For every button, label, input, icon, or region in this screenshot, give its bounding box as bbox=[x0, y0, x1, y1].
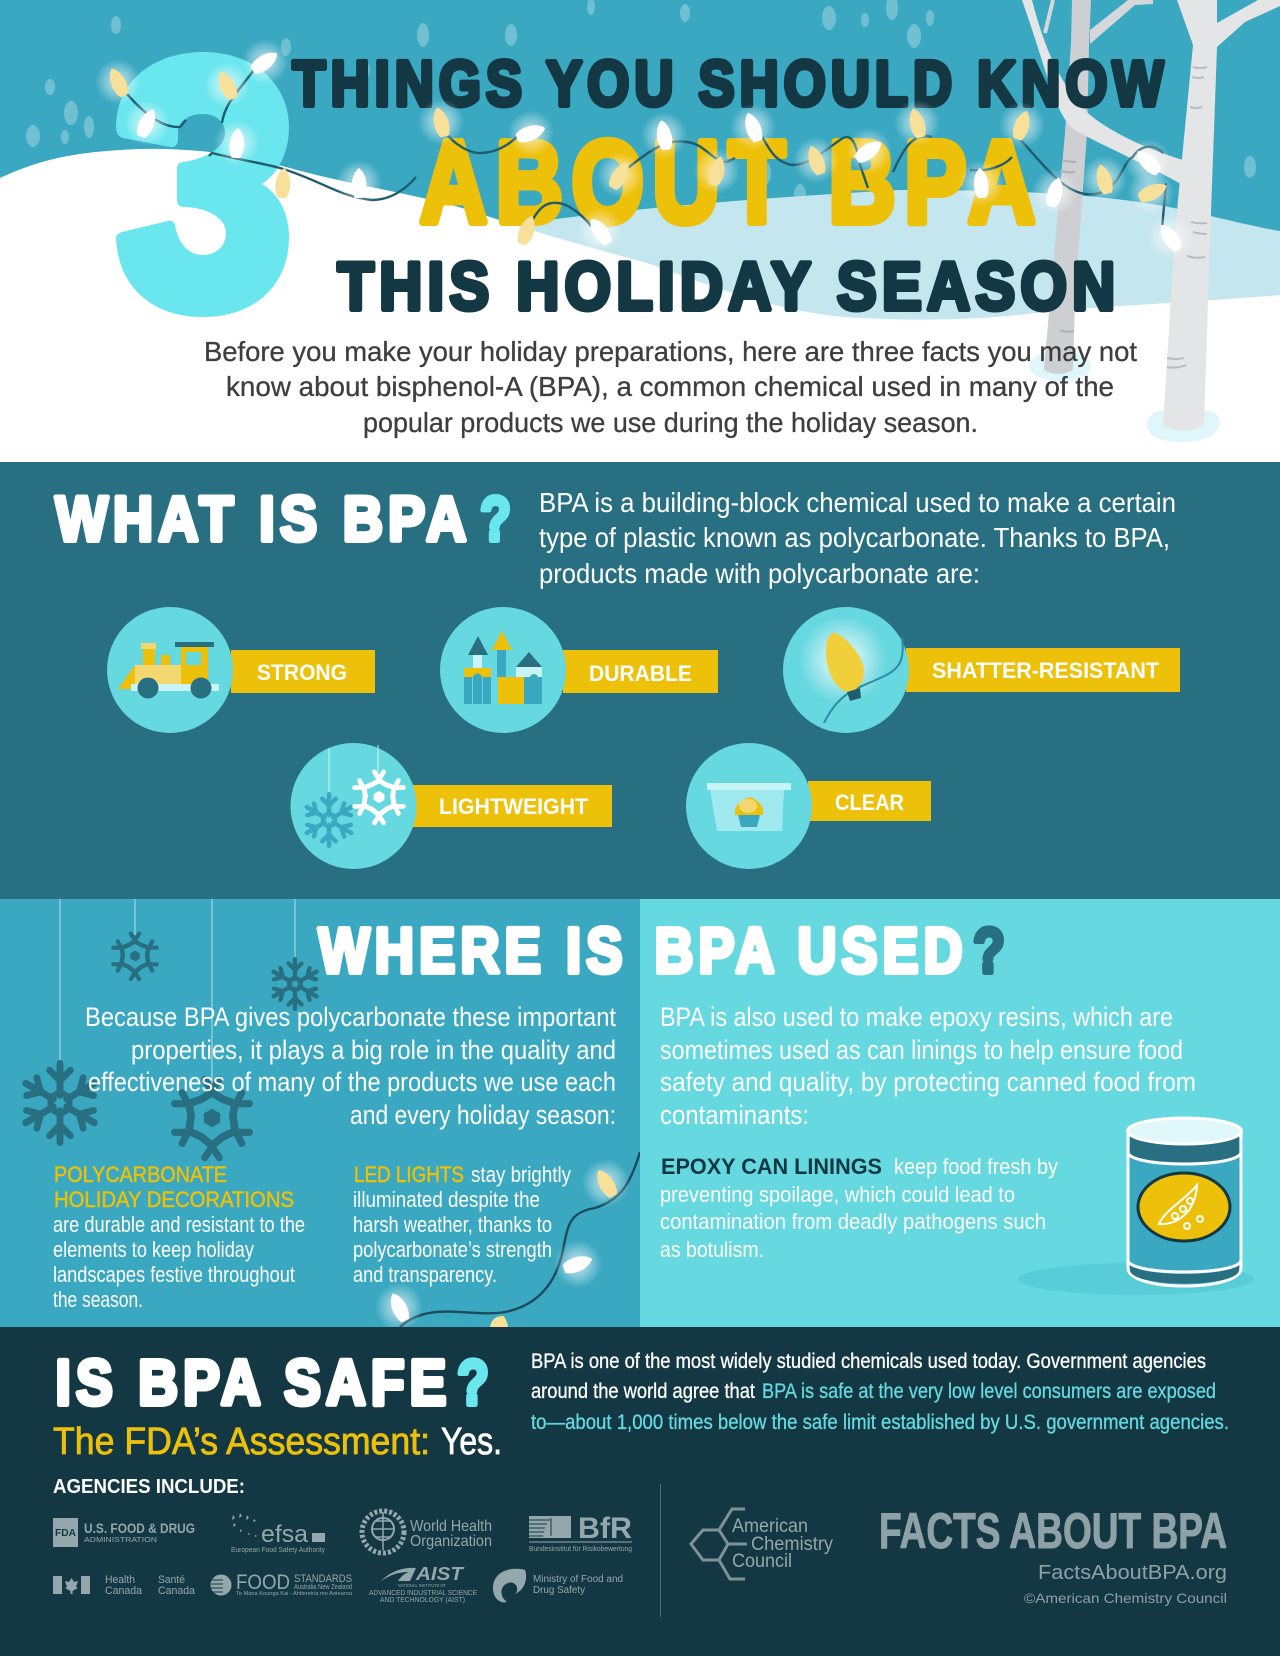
panel: what is BPA bbox=[0, 462, 1280, 899]
text: epoxy can linings: as botulism. bbox=[660, 1237, 764, 1262]
website: FactsAboutBPA.org bbox=[1038, 1562, 1227, 1584]
subheading: FDA assessment: The FDA’s Assessment: bbox=[53, 1421, 430, 1463]
logo: FDA: FDA bbox=[55, 1528, 76, 1539]
logo: American Chemistry Council: Chemistry bbox=[751, 1534, 833, 1555]
subheading: FDA assessment: Yes. bbox=[441, 1421, 502, 1463]
paragraph: epoxy resins: BPA is also used to make epoxy resins, which are bbox=[660, 1002, 1173, 1032]
logo: Food Standards: STANDARDS bbox=[294, 1573, 352, 1585]
property: lightweight bbox=[290, 743, 612, 869]
heading: where is BPA used: ? bbox=[973, 914, 1005, 986]
big numeral 3 bbox=[116, 52, 289, 317]
heading: is BPA safe: ? bbox=[457, 1346, 489, 1418]
paragraph: polycarbonate properties: effectiveness of many of the products we use each bbox=[88, 1067, 616, 1097]
intro text bbox=[204, 336, 1137, 438]
text: polycarbonate holiday decorations: elements to keep holiday bbox=[53, 1237, 254, 1262]
logo: Ministry of Food and Drug Safety bbox=[493, 1569, 623, 1602]
icon: light bulb bbox=[799, 616, 903, 723]
text: epoxy can linings: keep food fresh by bbox=[894, 1154, 1058, 1179]
text: LED lights: illuminated despite the bbox=[353, 1187, 540, 1212]
logo: EFSA: European Food Safety Authority bbox=[231, 1547, 325, 1554]
paragraph: safety bbox=[531, 1350, 1229, 1434]
icon: toy train bbox=[118, 642, 219, 698]
copyright: ©American Chemistry Council bbox=[1024, 1590, 1227, 1606]
text: LED lights: harsh weather, thanks to bbox=[353, 1212, 552, 1237]
logo: AIST bbox=[369, 1564, 477, 1604]
logo: Food Standards: Australia New Zealand bbox=[294, 1584, 352, 1591]
text: LED lights: polycarbonate’s strength bbox=[353, 1237, 552, 1262]
text: epoxy can linings: EPOXY CAN LININGS bbox=[661, 1154, 882, 1179]
pale distant hill bbox=[505, 190, 1280, 400]
panel: is BPA safe bbox=[0, 1327, 1280, 1656]
paragraph: epoxy resins: contaminants: bbox=[660, 1100, 809, 1130]
logo: Ministry of Food and Drug Safety: Drug Safety bbox=[533, 1585, 585, 1596]
intro paragraph: type of plastic known as polycarbonate. Thanks to BPA, bbox=[539, 522, 1170, 553]
property: strong bbox=[107, 607, 375, 733]
right tree snow mound bbox=[1147, 411, 1220, 442]
title line 3: THIS HOLIDAY SEASON bbox=[338, 248, 1120, 324]
text: LED lights bbox=[353, 1162, 571, 1287]
property: clear: CLEAR bbox=[835, 790, 904, 815]
intro text: popular products we use during the holiday season. bbox=[363, 407, 978, 438]
text: epoxy can linings: contamination from deadly pathogens such bbox=[660, 1209, 1046, 1234]
text: LED lights: and transparency. bbox=[353, 1262, 497, 1287]
property: durable: DURABLE bbox=[589, 661, 692, 686]
logo: AIST: AIST bbox=[415, 1564, 465, 1584]
text: LED lights: stay brightly bbox=[471, 1162, 571, 1187]
text: epoxy can linings bbox=[660, 1154, 1058, 1262]
icon: toy blocks bbox=[464, 631, 542, 704]
logo: American Chemistry Council: Council bbox=[732, 1551, 792, 1572]
title line 2: ABOUT BPA bbox=[420, 117, 1044, 247]
property: shatter-resistant bbox=[783, 607, 1180, 733]
text: polycarbonate holiday decorations bbox=[53, 1162, 305, 1312]
intro paragraph bbox=[539, 487, 1176, 589]
logo: EFSA bbox=[231, 1513, 325, 1554]
paragraph: epoxy resins: sometimes used as can linings to help ensure food bbox=[660, 1035, 1183, 1065]
text: polycarbonate holiday decorations: the season. bbox=[53, 1287, 143, 1312]
hanging snowflakes bbox=[21, 899, 320, 1158]
logo: FDA bbox=[53, 1518, 195, 1547]
panel: where is BPA used, right bbox=[640, 899, 1280, 1327]
heading: where is BPA used bbox=[318, 914, 1005, 986]
text: polycarbonate holiday decorations: HOLIDAY DECORATIONS bbox=[54, 1187, 294, 1212]
text: polycarbonate holiday decorations: POLYCARBONATE bbox=[54, 1162, 227, 1187]
logo: Food Standards: FOOD bbox=[236, 1571, 290, 1594]
intro paragraph: BPA is a building-block chemical used to make a certain bbox=[539, 487, 1176, 518]
logo: EFSA: efsa bbox=[261, 1521, 309, 1548]
paragraph: epoxy resins bbox=[660, 1002, 1196, 1130]
logo: AIST: NATIONAL INSTITUTE OF bbox=[398, 1583, 446, 1588]
heading: what is BPA: WHAT IS BPA bbox=[56, 484, 472, 554]
paragraph: polycarbonate properties bbox=[85, 1002, 617, 1130]
white snow hill bbox=[0, 149, 1280, 462]
paragraph: safety: BPA is safe at the very low level consumers are exposed bbox=[762, 1380, 1216, 1403]
panel: hero header bbox=[0, 0, 1280, 462]
icon: snowflakes bbox=[303, 745, 403, 846]
intro paragraph: products made with polycarbonate are: bbox=[539, 558, 980, 589]
logo: Health Canada: Canada bbox=[105, 1585, 143, 1597]
icon: clear container with cupcake bbox=[707, 783, 791, 831]
heading: where is BPA used: WHERE IS bbox=[318, 914, 628, 986]
logo: Health Canada bbox=[53, 1574, 196, 1597]
logo: WHO bbox=[362, 1511, 492, 1553]
logo: Ministry of Food and Drug Safety: Ministry of Food and bbox=[533, 1574, 623, 1585]
snow dots bbox=[26, 0, 1256, 206]
icon: food can bbox=[1018, 1118, 1254, 1295]
left tree snow mound bbox=[1029, 351, 1091, 381]
logo: BfR: BfR bbox=[578, 1512, 632, 1545]
intro text: Before you make your holiday preparations, here are three facts you may not bbox=[204, 336, 1137, 367]
paragraph: polycarbonate properties: Because BPA gives polycarbonate these important bbox=[85, 1002, 617, 1032]
text: polycarbonate holiday decorations: landscapes festive throughout bbox=[53, 1262, 295, 1287]
logo: Food Standards: Te Mana Kounga Kai - Ahitereiria me Aotearoa bbox=[236, 1591, 352, 1597]
logo: BfR bbox=[529, 1512, 632, 1553]
label: agencies include: AGENCIES INCLUDE: bbox=[53, 1476, 245, 1498]
logo: AIST: ADVANCED INDUSTRIAL SCIENCE bbox=[369, 1588, 477, 1597]
left birch tree bbox=[1044, 0, 1153, 374]
logo: Food Standards bbox=[210, 1571, 352, 1597]
paragraph: polycarbonate properties: properties, it plays a big role in the quality and bbox=[131, 1035, 616, 1065]
heading question mark: ? bbox=[480, 484, 511, 554]
property: clear bbox=[686, 743, 931, 869]
panel: where is BPA used, left bbox=[0, 899, 640, 1331]
right birch tree bbox=[1022, 0, 1280, 430]
string lights bbox=[95, 39, 1193, 260]
intro text: know about bisphenol-A (BPA), a common chemical used in many of the bbox=[226, 371, 1114, 402]
property: durable bbox=[440, 607, 718, 733]
text: LED lights: LED LIGHTS bbox=[354, 1162, 464, 1187]
paragraph: epoxy resins: safety and quality, by protecting canned food from bbox=[660, 1067, 1196, 1097]
logo: AIST: AND TECHNOLOGY (AIST) bbox=[380, 1595, 465, 1604]
paragraph: safety: around the world agree that bbox=[531, 1380, 755, 1403]
string lights, bottom right bbox=[375, 1152, 640, 1331]
logo: BfR: Bundesinstitut für Risikobewertung bbox=[529, 1546, 632, 1553]
paragraph: polycarbonate properties: and every holiday season: bbox=[350, 1100, 616, 1130]
paragraph: safety: BPA is one of the most widely studied chemicals used today. Government agencies bbox=[531, 1350, 1206, 1373]
heading: is BPA safe: IS BPA SAFE bbox=[56, 1346, 452, 1418]
property: shatter-resistant: SHATTER-RESISTANT bbox=[932, 658, 1160, 683]
logo: Health Canada: Canada bbox=[158, 1585, 196, 1597]
property: lightweight: LIGHTWEIGHT bbox=[439, 794, 589, 819]
property: strong: STRONG bbox=[257, 660, 347, 685]
heading: where is BPA used: BPA USED bbox=[654, 914, 968, 986]
text: epoxy can linings: preventing spoilage, which could lead to bbox=[660, 1182, 1015, 1207]
logo: American Chemistry Council: American bbox=[732, 1516, 808, 1537]
logo: WHO: World Health bbox=[410, 1518, 492, 1535]
logo: FDA: U.S. FOOD & DRUG bbox=[84, 1521, 195, 1536]
logo: FDA: ADMINISTRATION bbox=[84, 1537, 157, 1544]
logo: WHO: Organization bbox=[410, 1533, 492, 1550]
text: polycarbonate holiday decorations: are durable and resistant to the bbox=[53, 1212, 305, 1237]
logo: Health Canada: Santé bbox=[158, 1574, 185, 1586]
logo: Health Canada: Health bbox=[105, 1574, 135, 1586]
logo: American Chemistry Council bbox=[691, 1509, 833, 1579]
